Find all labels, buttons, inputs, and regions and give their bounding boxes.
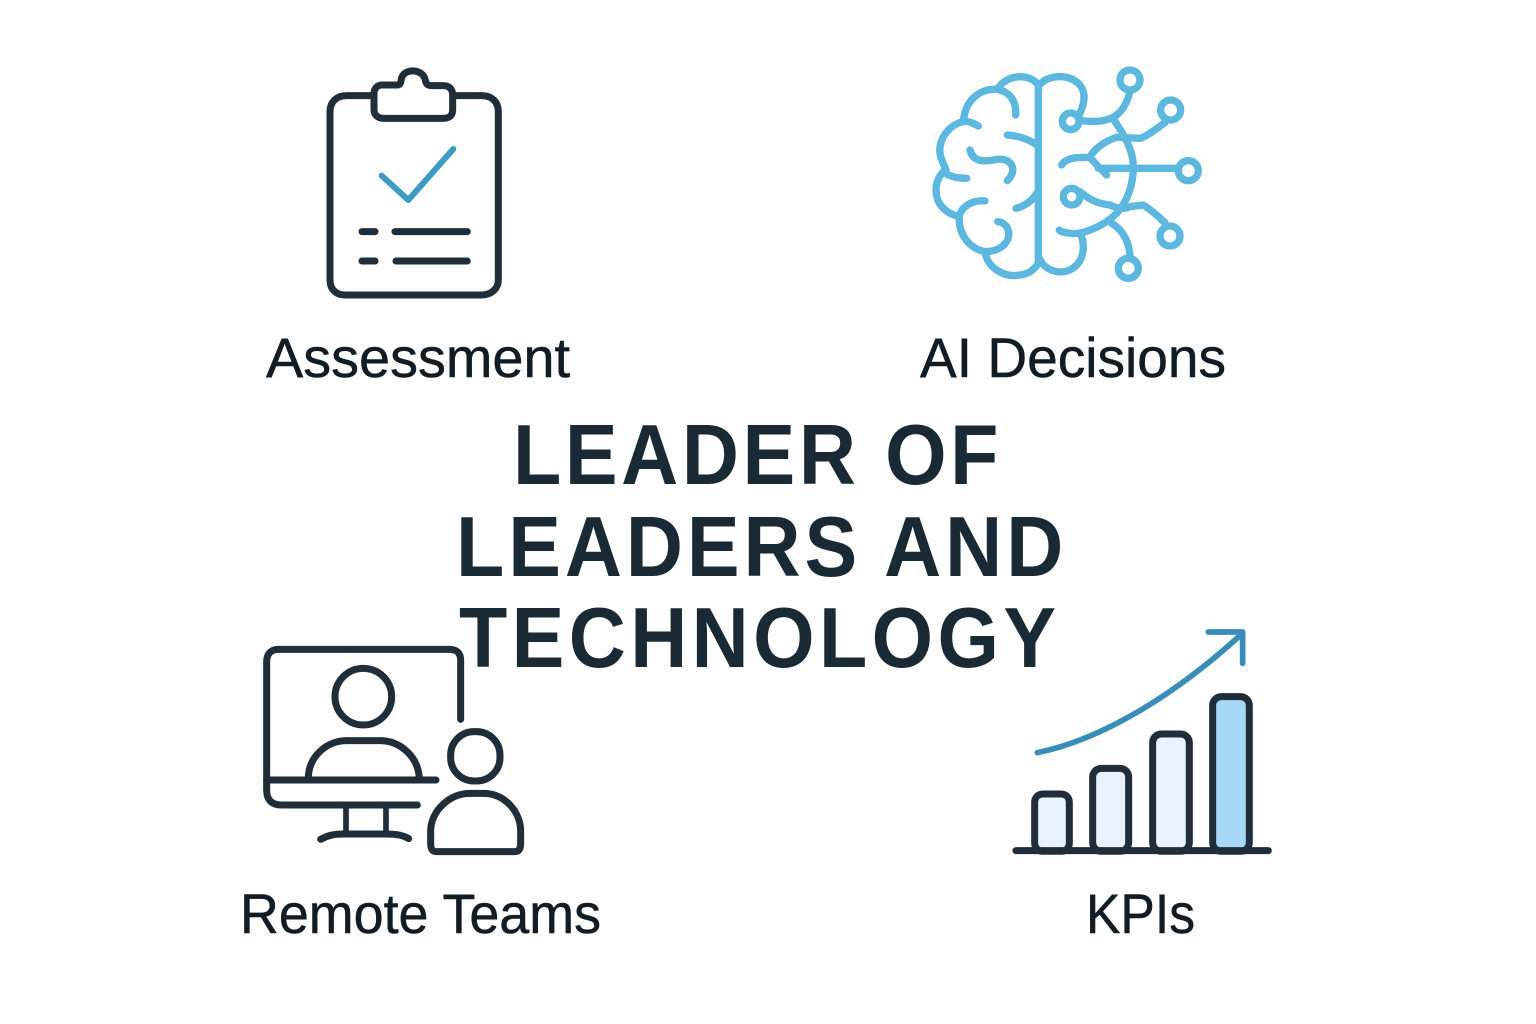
label: KPIs: KPIs [1086,882,1195,945]
label: AI Decisions: AI Decisions [920,326,1226,389]
title: LEADER OF [513,408,1001,503]
icon: brain with circuit nodes [936,70,1198,278]
panel: remote teams [240,649,601,945]
icon: video call monitor and person [267,649,521,852]
label: Assessment: Assessment [266,326,570,389]
title [456,408,1066,686]
title: TECHNOLOGY [459,591,1059,686]
label: Remote Teams: Remote Teams [240,882,601,945]
icon: clipboard with checkmark [330,71,498,295]
chart bars [1016,697,1268,851]
arrow: growth trend [1037,632,1243,753]
panel: KPIs [1016,632,1268,945]
title: LEADERS AND [456,500,1066,595]
panel: AI decisions [920,70,1226,389]
panel: assessment [266,71,570,389]
icon: rising bar chart with arrow [1016,632,1268,851]
